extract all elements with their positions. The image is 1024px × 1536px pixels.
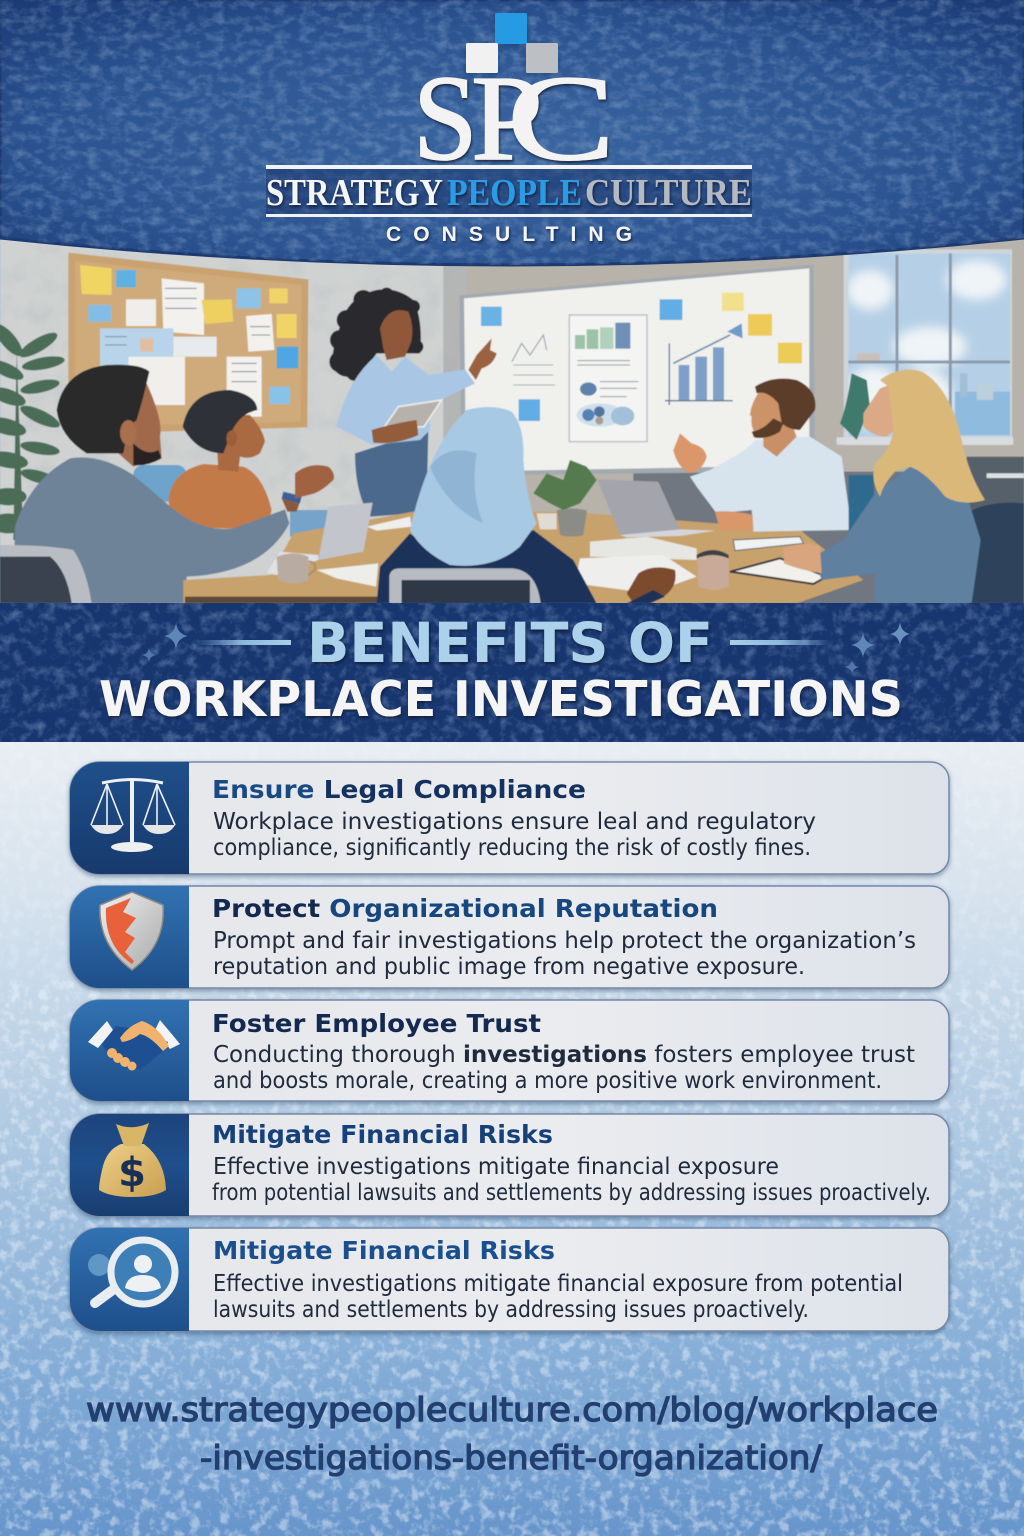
heading: Ensure Legal Compliance [212,775,586,804]
title decorations [142,622,910,674]
body text: Effective investigations mitigate financial exposure from potential [213,1271,903,1297]
kid in orange sweater [133,390,332,537]
logo rule bottom [266,214,752,217]
footer url: www.strategypeopleculture.com/blog/workplace [86,1390,938,1429]
logo squares [466,13,558,73]
plant left [0,320,66,540]
title line 1: BENEFITS OF [307,611,713,675]
icon: money bag [99,1123,166,1197]
body text: lawsuits and settlements by addressing issues proactively. [213,1297,809,1323]
icon: scales of justice [91,779,175,852]
panel: foster employee trust [70,1000,949,1101]
window [837,249,1013,445]
icon: money bag: $ [118,1150,146,1196]
icon: magnifier with person [88,1240,175,1304]
body text [213,928,916,980]
body text [213,809,816,861]
icon: shield [100,892,163,970]
logo monogram SPC: C [507,51,615,186]
icon: handshake [88,1020,180,1070]
header band [0,0,1024,266]
logo wordmark: STRATEGY [266,172,443,214]
logo monogram SPC [413,50,615,186]
whiteboard [459,265,815,475]
meeting table [183,460,863,603]
logo wordmark: PEOPLE [447,172,582,214]
footer url: -investigations-benefit-organization/ [200,1438,823,1477]
logo monogram SPC: S [413,50,477,186]
teal chair [849,475,874,532]
logo rule top [266,165,752,169]
presenter woman [329,288,497,517]
footer url [86,1390,938,1477]
walls [0,237,1024,605]
body text [213,1042,915,1094]
logo monogram SPC: P [471,51,543,186]
heading: Foster Employee Trust [212,1009,541,1038]
heading: Mitigate Financial Risks [212,1120,553,1149]
man in grey shirt [0,365,334,603]
woman in headscarf [377,407,676,603]
body text: Effective investigations mitigate financial exposure [213,1154,779,1180]
body text: Prompt and fair investigations help protect the organization’s [213,928,916,954]
panel: mitigate financial risks (money) [70,1114,949,1216]
logo wordmark: CULTURE [585,172,752,214]
body text: reputation and public image from negative exposure. [213,954,805,980]
body text [212,1154,931,1206]
body text: and boosts morale, creating a more positive work environment. [213,1068,882,1094]
title band [0,603,1024,742]
body text: compliance, significantly reducing the risk of costly fines. [213,835,811,861]
body text: Workplace investigations ensure leal and regulatory [213,809,816,835]
lower background panel [0,740,1024,1536]
body text [213,1271,903,1323]
man in white shirt [597,378,852,537]
panel: protect organizational reputation [70,886,949,988]
illustration: team meeting scene [0,237,1024,605]
blonde woman [783,370,1024,603]
heading: Protect Organizational Reputation [212,894,718,923]
logo [266,13,752,246]
logo wordmark [266,172,752,214]
heading: Mitigate Financial Risks [213,1236,555,1265]
title line 2: WORKPLACE INVESTIGATIONS [99,671,903,728]
body text: Conducting thorough investigations fosters employee trust [213,1042,915,1068]
panel: mitigate financial risks (magnifier) [70,1228,949,1331]
panel: ensure legal compliance [70,762,949,874]
logo tagline: CONSULTING [386,223,632,246]
corkboard [68,253,308,433]
